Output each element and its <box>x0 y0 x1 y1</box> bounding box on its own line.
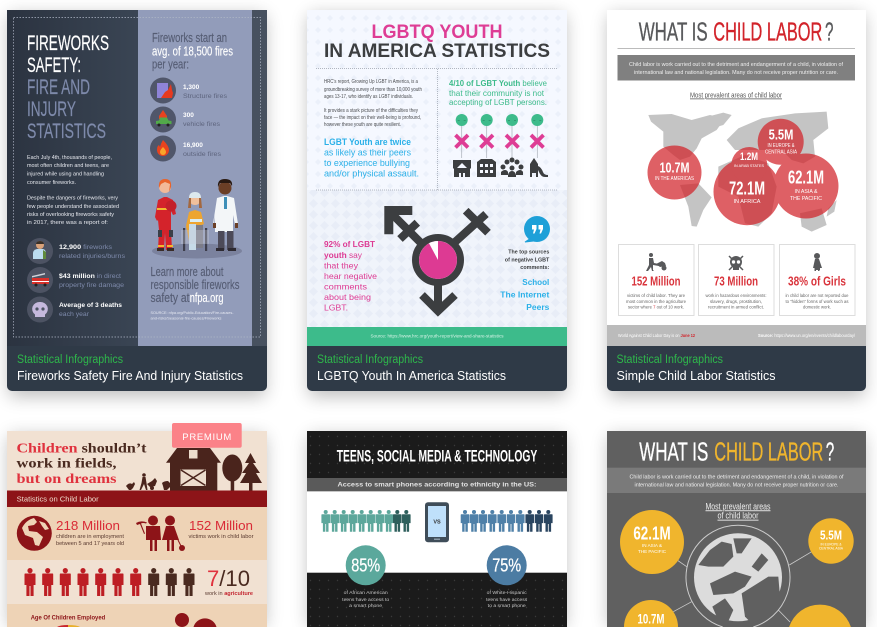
call to action <box>150 265 240 305</box>
heading: work in fields, <box>16 456 116 471</box>
callout: community: that their community is not <box>449 88 545 98</box>
source bar <box>607 325 866 346</box>
world map with bubbles <box>648 112 838 232</box>
intro text: It provides a stark picture of the difficulties they <box>324 108 418 114</box>
world map with bubbles: IN ARAB STATES <box>734 164 764 168</box>
heading: age of children: Age Of Children Employed <box>31 616 106 622</box>
pictogram: white hispanic teens <box>461 510 553 532</box>
card: LGBTQ youth <box>307 10 567 391</box>
stat: 152 million: victims work in child labor <box>188 534 254 540</box>
stat: 7/10: work in agriculture <box>205 591 253 597</box>
stat box: 73 million: recruitment in armed conflict. <box>708 305 764 310</box>
heading: but on dreams <box>16 471 116 486</box>
stat: 75 percent <box>486 545 528 608</box>
stat: 75 percent: teens have access <box>486 597 528 602</box>
pie chart top <box>57 625 80 627</box>
icon: children with tools <box>136 516 185 551</box>
statistic: damage: $43 million in direct <box>59 273 121 280</box>
world map with bubbles: CENTRAL ASIA <box>765 149 798 155</box>
callout: bullying <box>324 137 419 178</box>
pictogram: african american teens <box>321 510 411 532</box>
stat: 85 percent: teens have access to <box>342 597 390 602</box>
icons: sad faces and crosses <box>456 114 544 158</box>
stat: 85 percent <box>342 545 390 608</box>
title <box>639 17 834 47</box>
card: teens, social media and technology <box>307 431 567 627</box>
intro text: few people understand the associated <box>27 204 119 210</box>
callout: negative comments: 92% of LGBT <box>324 239 376 249</box>
text: top sources <box>500 250 550 312</box>
icon: fire truck <box>27 267 53 293</box>
stat: vehicle fires: vehicle fires <box>183 121 221 128</box>
intro text: however these youth are quite resilient. <box>324 122 401 128</box>
stat: outside fires <box>183 142 222 158</box>
stat box: 152 million: 152 Million <box>632 274 681 289</box>
source bar <box>307 327 567 346</box>
statistic: injuries: 12,900 fireworks <box>59 244 113 251</box>
icon: phone vs <box>425 502 449 542</box>
title: ? <box>825 17 834 47</box>
icon: globe <box>17 516 52 551</box>
source bar: Source: https://www.un.org/en/events/childlabourday/ <box>758 333 856 338</box>
world map with bubbles: 10.7M <box>660 160 690 177</box>
icon: vehicle fire <box>150 106 176 132</box>
icon: transgender symbol with pie <box>384 206 488 311</box>
stat: 75 percent: to a smart phone <box>488 603 526 608</box>
callout: bullying: LGBT Youth are twice <box>324 137 411 147</box>
stat box: 38 percent of girls: in child labor are not reported due <box>786 293 849 298</box>
title: LGBTQ YOUTH <box>372 21 502 43</box>
statistic: injuries: related injuries/burns <box>59 253 126 260</box>
bubble: europe central asia: IN EUROPE & <box>820 542 842 546</box>
heading: fires per year: Fireworks start an <box>152 31 227 45</box>
world map with bubbles: IN THE AMERICAS <box>655 176 695 182</box>
caption bar: LGBTQ Youth In America Statistics <box>317 369 506 383</box>
statistic: deaths: Average of 3 deaths <box>59 302 122 309</box>
callout: negative comments: LGBT. <box>324 302 348 312</box>
definition band: international law and national legislation. Many do not receive proper nutrition or care. <box>634 482 839 488</box>
callout: community: accepting of LGBT persons. <box>449 97 547 107</box>
intro text: ages 13-17, who identify as LGBT individuals. <box>324 94 413 100</box>
heading: fires per year: per year: <box>152 58 189 72</box>
caption bar: Simple Child Labor Statistics <box>616 369 776 383</box>
stat: 85 percent: a smart phone <box>349 603 383 608</box>
icons: home, school, peers, playground <box>453 158 548 177</box>
icon: injured person <box>27 238 53 264</box>
heading: fireworks safety: SAFETY: <box>27 54 81 77</box>
subheading <box>706 501 771 521</box>
icon: outside fire <box>150 136 176 162</box>
definition box: international law and national legislation. Many do not receive proper nutrition or care. <box>634 70 838 76</box>
call to action: safety at <box>150 291 190 305</box>
bubble: europe central asia: CENTRAL ASIA <box>819 546 844 550</box>
source text: and-risks/Seasonal-fire-causes/Fireworks <box>150 316 222 320</box>
world map with bubbles: IN ASIA & <box>794 189 818 195</box>
illustration: firefighter, patient and doctor <box>152 179 242 258</box>
callout: negative comments: about being <box>324 292 371 302</box>
bubble: asia pacific: 62.1M <box>633 523 671 543</box>
intro text: Despite the dangers of fireworks, very <box>27 196 118 202</box>
subheading: Most prevalent areas <box>706 501 771 511</box>
subheading band <box>307 478 567 491</box>
card: children shouldn't work in fields <box>7 423 267 627</box>
world map with bubbles: IN AFRICA <box>734 199 761 205</box>
stat: 152 million: 152 Million <box>189 518 253 533</box>
statistic: injuries <box>59 244 126 260</box>
bubble: americas <box>624 600 678 627</box>
stat box: 152 million: sector where 7 out of 10 work. <box>628 305 684 310</box>
bubble: africa <box>789 605 851 627</box>
stat: vehicle fires <box>183 112 221 128</box>
title: WHAT IS <box>639 17 708 47</box>
icon: phone vs: VS <box>433 520 441 526</box>
callout: community: 4/10 of LGBT Youth believe <box>449 78 547 88</box>
callout: bullying: to experience bullying <box>324 158 410 168</box>
title: TEENS, SOCIAL MEDIA & TECHNOLOGY <box>337 447 538 466</box>
stat: 218 million: between 5 and 17 years old <box>56 541 124 547</box>
world map with bubbles: THE PACIFIC <box>790 196 822 202</box>
definition box <box>618 55 855 80</box>
subheading band: Access to smart phones according to ethnicity in the US: <box>338 482 536 489</box>
title: IN AMERICA STATISTICS <box>324 40 550 62</box>
heading: fires per year: avg. of 18,500 fires <box>152 44 233 58</box>
world map with bubbles: IN EUROPE & <box>768 143 795 149</box>
stat: 7/10: 7/10 <box>207 566 250 591</box>
call to action: nfpa.org <box>190 291 224 305</box>
title <box>639 437 834 467</box>
world map with bubbles: 62.1M <box>788 168 824 188</box>
stat: 218 million: 218 Million <box>56 518 120 533</box>
banner: Statistics on Child Labor <box>17 494 99 504</box>
stat box: 152 million: most common in the agriculture <box>626 299 686 304</box>
callout: bullying: and/or physical assault. <box>324 168 419 178</box>
text: top sources: comments: <box>520 265 550 271</box>
caption bar: Statistical Infographics <box>616 354 723 366</box>
stat box: 38 percent of girls: domestic work. <box>803 305 831 310</box>
text: top sources: The Internet <box>500 290 550 300</box>
title: WHAT IS <box>639 437 708 467</box>
stat box: 152 million: victims of child labor. They are <box>627 293 685 298</box>
caption bar <box>607 346 866 391</box>
icon: structure fire <box>150 78 176 104</box>
text: top sources: School <box>522 278 549 287</box>
card: what is child labor dark <box>607 431 866 627</box>
stat box: 73 million: 73 Million <box>714 274 758 289</box>
definition box: Child labor is work carried out to the detriment and endangerment of a child, in violation of <box>629 62 843 68</box>
callout: negative comments: comments <box>324 282 367 292</box>
callout: negative comments: hear negative <box>324 271 377 281</box>
heading: fireworks safety: INJURY <box>27 98 76 121</box>
stat box: 38 percent of girls: to “hidden” forms of work such as <box>786 299 849 304</box>
bubble: asia pacific: IN ASIA & <box>642 543 662 548</box>
callout: community <box>449 78 547 107</box>
world map with bubbles: 72.1M <box>729 178 765 198</box>
intro text: HRC's report, Growing Up LGBT in America, is a <box>324 79 418 85</box>
stat: structure fires: 1,300 <box>183 84 200 91</box>
call to action: responsible fireworks <box>150 278 240 292</box>
heading <box>16 440 147 486</box>
statistic: damage: property fire damage <box>59 282 124 289</box>
text: top sources: of negative LGBT <box>505 257 549 263</box>
intro text <box>324 79 422 128</box>
statistic: deaths <box>59 302 122 318</box>
stat: 218 million <box>56 518 125 547</box>
callout: bullying: as likely as their peers <box>324 148 411 158</box>
badge: premium <box>172 423 242 448</box>
subheading: Most prevalent areas of child labor <box>690 90 782 100</box>
stat box: 152 million <box>618 244 694 316</box>
source text: SOURCE: nfpa.org/Public-Education/Fire-causes- <box>150 311 234 315</box>
source bar: Source: https://www.hrc.org/youth-report/view-and-share-statistics <box>370 334 504 339</box>
badge: premium: PREMIUM <box>182 432 231 443</box>
stat: vehicle fires: 300 <box>183 112 194 119</box>
stat: 75 percent: of White-Hispanic <box>487 590 528 595</box>
bubble: asia pacific: THE PACIFIC <box>638 549 667 554</box>
title: ? <box>826 437 834 467</box>
stat box: 73 million: slavery, drugs, prostitution, <box>710 299 762 304</box>
heading: fires per year <box>152 31 233 72</box>
intro text: in 2017, there was a report of: <box>27 220 108 226</box>
heading: Children shouldn’t <box>16 440 147 455</box>
intro text: consumer fireworks. <box>27 180 76 186</box>
intro text: Each July 4th, thousands of people, <box>27 155 112 161</box>
intro text: groundbreaking survey of more than 10,000 youth <box>324 87 422 93</box>
pictogram: seven in ten <box>24 568 194 596</box>
source text <box>150 311 234 320</box>
stat: 75 percent: 75% <box>492 556 521 576</box>
stat: 85 percent: 85% <box>351 556 380 576</box>
caption bar: Statistical Infographics <box>17 354 123 366</box>
statistic: deaths: each year <box>59 311 90 318</box>
bubble: americas: 10.7M <box>638 611 664 627</box>
icon: skull <box>27 296 53 322</box>
subheading: of child labor <box>718 511 759 521</box>
caption bar <box>7 346 267 391</box>
intro text: most often children and teens, are <box>27 163 109 169</box>
text: top sources: The top sources <box>508 250 550 256</box>
intro text <box>27 155 119 226</box>
intro text: injured while using and handling <box>27 172 104 178</box>
definition band: Child labor is work carried out to the detriment and endangerment of a child, in violation of <box>630 474 844 480</box>
callout: negative comments <box>324 239 377 312</box>
stat: outside fires: outside fires <box>183 151 222 158</box>
title <box>324 21 550 62</box>
stat box: 38 percent of girls: 38% of Girls <box>788 274 846 289</box>
stat: outside fires: 16,900 <box>183 142 203 149</box>
call to action: Learn more about <box>150 265 224 279</box>
card: simple child labor <box>607 10 866 391</box>
world map with bubbles: 1.2M <box>740 151 758 163</box>
callout: negative comments: that they <box>324 260 359 270</box>
world map with bubbles: 5.5M <box>769 126 793 143</box>
caption bar: Statistical Infographics <box>317 354 423 366</box>
globe <box>673 525 812 627</box>
stat: 85 percent: of African American <box>344 590 388 595</box>
callout: negative comments: youth say <box>324 250 363 260</box>
stat: structure fires: Structure fires <box>183 93 228 100</box>
statistic: damage <box>59 273 124 289</box>
stat: 218 million: children are in employment <box>56 534 125 540</box>
illustration: farm <box>126 448 262 490</box>
stat box: 73 million <box>698 244 774 316</box>
bubble: europe central asia: 5.5M <box>820 527 842 542</box>
caption bar: Fireworks Safety Fire And Injury Statistics <box>17 369 243 383</box>
stat: structure fires <box>183 84 228 100</box>
icon: children <box>175 613 216 627</box>
text: top sources: Peers <box>526 303 550 312</box>
banner <box>7 490 267 507</box>
stat: 152 million <box>188 518 254 540</box>
heading: fireworks safety: FIRE AND <box>27 76 90 99</box>
stat box: 73 million: work in hazardous environments: <box>706 293 766 298</box>
heading: fireworks safety: FIREWORKS <box>27 32 109 55</box>
source bar: World Against Child Labor Day is on June 12 <box>618 333 696 338</box>
stat box: 38 percent of girls <box>780 244 855 316</box>
intro text: face — the impact on their well-being is profound, <box>324 115 421 121</box>
heading: fireworks safety <box>27 32 109 143</box>
caption bar <box>307 346 567 391</box>
heading: fireworks safety: STATISTICS <box>27 120 106 143</box>
icon: speech bubble <box>524 216 550 242</box>
card: fireworks safety <box>7 10 267 391</box>
definition band <box>607 468 866 493</box>
intro text: risks of overlooking fireworks safety <box>27 212 114 218</box>
bubble: europe central asia <box>808 518 854 564</box>
bubble: asia pacific <box>620 510 684 574</box>
